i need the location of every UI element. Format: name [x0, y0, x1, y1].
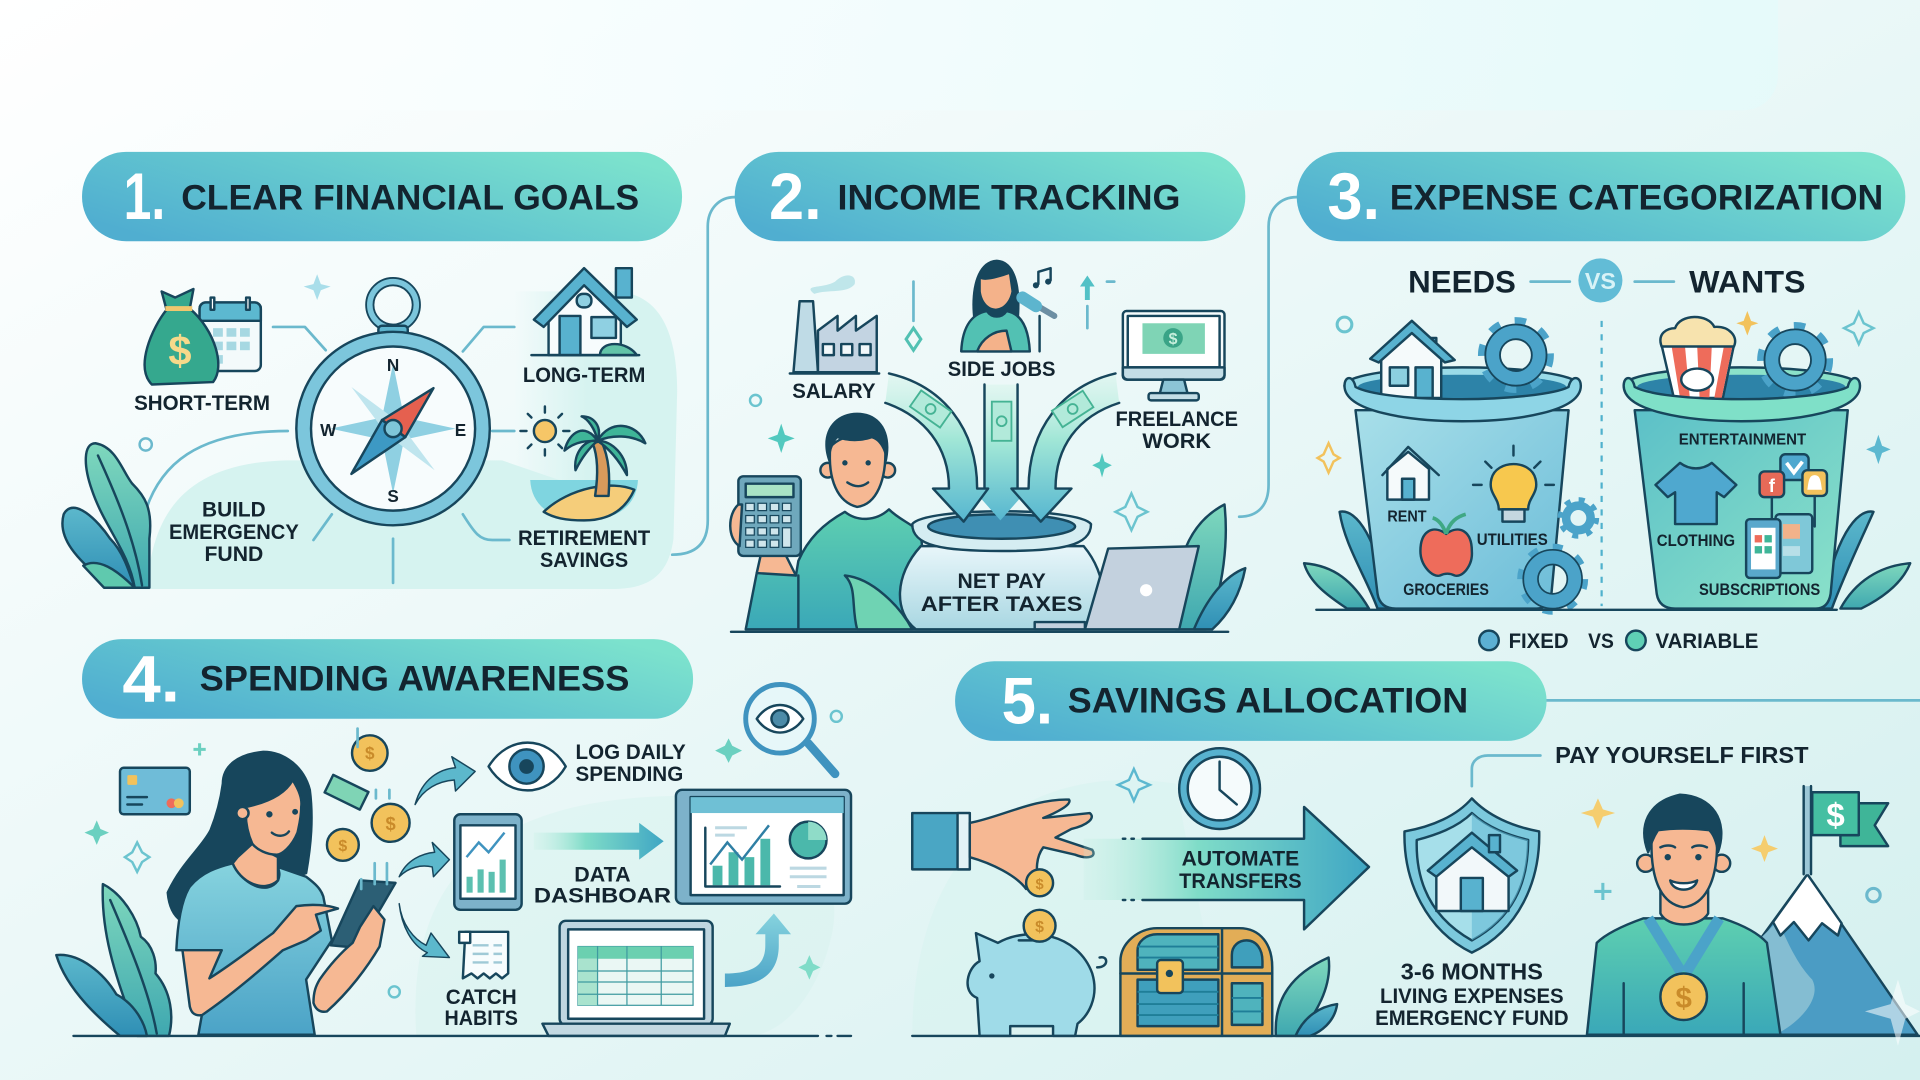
label: rent: RENT: [1387, 509, 1427, 526]
heading 2: 2.: [769, 160, 822, 234]
icon: jar net pay: AFTER TAXES: [921, 593, 1083, 616]
arrows from phone: [399, 757, 475, 958]
label: build emergency fund: BUILD: [202, 499, 266, 522]
icon: freelance monitor: [1123, 311, 1224, 400]
connector lines between panels: [672, 197, 1920, 700]
label: build emergency fund: [169, 499, 299, 566]
heading 5: 5.: [1002, 665, 1053, 739]
icon: jar net pay: NET PAY: [958, 570, 1046, 593]
panel 5 ground: [912, 1035, 1920, 1037]
icon: laptop spreadsheet: [542, 921, 730, 1036]
icon: receipt: [459, 932, 508, 978]
leaves panel 5: [1276, 958, 1337, 1036]
panel 3: expense categorization: [1297, 152, 1910, 653]
label: freelance work: WORK: [1142, 430, 1211, 453]
heading 3: EXPENSE CATEGORIZATION: [1390, 178, 1883, 217]
decorative leaves panel 1: [62, 274, 331, 588]
callout: pay yourself first: [1472, 742, 1809, 786]
heading 5: [955, 661, 1547, 741]
label: catch habits: [444, 986, 518, 1030]
shirt: [176, 863, 332, 1035]
label: freelance work: [1116, 408, 1238, 453]
label: side jobs: SIDE JOBS: [948, 358, 1056, 381]
icon: piggy bank: $: [1035, 919, 1044, 936]
label: freelance work: FREELANCE: [1116, 408, 1238, 431]
icon: house long-term: [531, 268, 639, 355]
label: long-term: LONG-TERM: [523, 364, 645, 387]
heading 1: [82, 152, 682, 241]
icon: freelance monitor: $: [1169, 331, 1178, 348]
heading 2: [735, 152, 1245, 241]
icon: credit card: [120, 768, 190, 814]
watermark sparkle: [1865, 980, 1920, 1046]
icon: laptop and leaves: [845, 504, 1245, 629]
icon: money bag and calendar: [145, 289, 261, 384]
icon: gear: [1762, 327, 1828, 393]
heading 3: 3.: [1327, 160, 1380, 234]
label: log daily spending: SPENDING: [576, 763, 683, 786]
label: catch habits: HABITS: [444, 1007, 518, 1030]
panel 4 sparkles: [84, 738, 820, 997]
panel 1 background blob: [147, 291, 677, 589]
panel 3 sparkles: [1318, 311, 1891, 473]
label: three to six months emergency fund: EMERGENCY FUND: [1375, 1007, 1569, 1030]
panel 3 ground: [1316, 609, 1837, 611]
icon: magnifier: [746, 684, 842, 774]
label: log daily spending: LOG DAILY: [576, 741, 686, 764]
label: data dashboar: DASHBOAR: [534, 884, 671, 907]
icon: t-shirt: [1656, 463, 1736, 524]
label: retirement savings: [518, 527, 650, 572]
arrow: automate transfers: [1084, 807, 1369, 929]
bucket: needs: [1344, 321, 1597, 611]
icon: eye: [489, 743, 566, 790]
decorative callout lines: [144, 327, 514, 583]
label: catch habits: CATCH: [446, 986, 517, 1009]
arrows: income streams into pot: [885, 373, 1119, 522]
panel 5 sparkles: [1118, 769, 1880, 902]
needs vs wants: VS: [1585, 268, 1616, 294]
icon: retirement island: [520, 407, 645, 520]
icon: compass: E: [455, 420, 466, 440]
icon: compass: N: [387, 355, 399, 375]
icon: compass: S: [387, 486, 399, 506]
needs vs wants: WANTS: [1689, 264, 1806, 300]
label: salary: SALARY: [792, 380, 876, 403]
label: data dashboar: [534, 864, 671, 907]
label: groceries: GROCERIES: [1403, 580, 1489, 599]
icon: coins and cash: [325, 729, 410, 889]
icon: phones and social apps: f: [1769, 475, 1776, 496]
label: retirement savings: RETIREMENT: [518, 527, 650, 550]
icon: phones and social apps: [1746, 454, 1827, 578]
panel 4 ground: [73, 1035, 851, 1037]
panel 4: spending awareness: [56, 639, 851, 1036]
icon: mountain and flag: $: [1826, 798, 1845, 835]
legend: fixed vs variable: VARIABLE: [1656, 630, 1758, 653]
panel 2: income tracking: [730, 152, 1245, 632]
label: short-term: SHORT-TERM: [134, 392, 270, 415]
label: entertainment: ENTERTAINMENT: [1679, 431, 1807, 448]
face: [246, 780, 301, 855]
icon: gear: [1483, 322, 1549, 388]
icon: jar net pay: [900, 511, 1103, 629]
icon: coins and cash: $: [365, 743, 375, 763]
legend: fixed vs variable: VS: [1588, 630, 1614, 653]
icon: coins and cash: $: [338, 838, 347, 855]
legend: fixed vs variable: [1479, 630, 1758, 653]
leaves behind buckets: [1304, 512, 1910, 609]
legend: fixed vs variable: FIXED: [1509, 630, 1569, 653]
man with medal: $: [1676, 982, 1692, 1015]
heading 1: CLEAR FINANCIAL GOALS: [181, 178, 639, 217]
arrow: up curved: [725, 913, 791, 987]
heading 1: 1.: [124, 160, 165, 234]
leaves panel 4: [56, 884, 171, 1036]
icon: compass: W: [320, 420, 337, 440]
top light band: [0, 0, 1778, 110]
icon: light bulb: [1473, 446, 1554, 522]
woman with phone: [168, 752, 396, 1035]
heading 4: [82, 639, 693, 719]
icon: shield with house: [1404, 798, 1539, 953]
man with medal: [1587, 795, 1780, 1035]
callout: pay yourself first: PAY YOURSELF FIRST: [1555, 742, 1809, 768]
panel 5: savings allocation: [912, 661, 1920, 1046]
label: automate transfers: [1179, 848, 1302, 893]
panel 1: clear financial goals: [62, 152, 682, 589]
panel 4 background blob: [415, 796, 834, 1036]
icon: salary factory: [790, 275, 879, 373]
heading 3: [1297, 152, 1905, 241]
icon: house in bucket: [1370, 321, 1455, 398]
icon: mountain and flag: [1762, 786, 1918, 1035]
label: three to six months emergency fund: 3-6 MONTHS: [1401, 959, 1543, 985]
label: utilities: UTILITIES: [1477, 530, 1548, 549]
icon: popcorn: [1660, 317, 1735, 398]
label: automate transfers: AUTOMATE: [1182, 848, 1299, 871]
label: build emergency fund: EMERGENCY: [169, 521, 299, 544]
panel 2 sparkles: [750, 276, 1147, 530]
icon: small gears: [1521, 500, 1597, 611]
label: clothing: CLOTHING: [1657, 531, 1735, 550]
label: data dashboar: DATA: [574, 864, 631, 887]
person with calculator: [730, 413, 931, 629]
needs vs wants: [1408, 258, 1806, 606]
icon: piggy bank: [968, 910, 1106, 1036]
icon: clock: [1179, 748, 1260, 829]
neck: [233, 844, 278, 886]
left arm: [182, 905, 338, 1015]
icon: hand dropping coin: [912, 800, 1094, 896]
label: build emergency fund: FUND: [204, 543, 263, 566]
heading 5: SAVINGS ALLOCATION: [1068, 682, 1468, 721]
label: log daily spending: [576, 741, 686, 786]
icon: apple: [1420, 514, 1472, 576]
bottom-left blob panel 5: [912, 780, 1224, 1036]
icon: money bag and calendar: $: [168, 327, 192, 374]
heading 4: 4.: [122, 643, 180, 717]
icon: tablet chart: [454, 814, 522, 910]
label: subscriptions: SUBSCRIPTIONS: [1699, 580, 1820, 599]
right arm: [313, 906, 384, 1012]
icon: treasure chest: [1120, 928, 1272, 1036]
needs vs wants: NEEDS: [1408, 264, 1516, 300]
icon: hand dropping coin: $: [1036, 877, 1044, 893]
heading 4: SPENDING AWARENESS: [200, 660, 629, 699]
label: three to six months emergency fund: LIVING EXPENSES: [1380, 985, 1564, 1008]
label: automate transfers: TRANSFERS: [1179, 870, 1302, 893]
icon: compass: [296, 278, 490, 525]
icon: dashboard screen: [676, 790, 851, 904]
icon: rent house: [1382, 447, 1439, 500]
bucket: wants: [1624, 317, 1860, 609]
icon: singer side job: [961, 260, 1054, 351]
hair: [168, 752, 312, 921]
panel 2 ground: [731, 631, 1228, 633]
icon: coins and cash: $: [386, 813, 396, 834]
arrow to dashboard: [534, 823, 664, 860]
label: retirement savings: SAVINGS: [540, 549, 628, 572]
phone: [331, 880, 396, 948]
label: three to six months emergency fund: [1375, 959, 1569, 1030]
heading 2: INCOME TRACKING: [838, 178, 1180, 217]
